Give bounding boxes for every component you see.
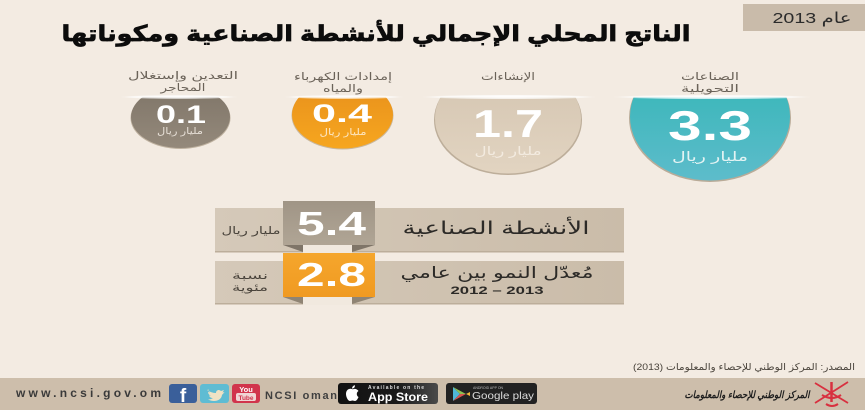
bar: growth rate: 2.8 <box>297 256 366 293</box>
panel: mining and quarrying: مليار ريال <box>157 126 203 137</box>
website address: www.ncsi.gov.om <box>15 386 161 400</box>
bar: industrial activities total: 5.4 <box>297 205 367 242</box>
social account name: NCSI oman <box>265 390 337 402</box>
badge: google play: ANDROID APP ON <box>473 386 504 390</box>
bar: industrial activities total <box>215 201 624 253</box>
icon: youtube: You <box>239 385 253 394</box>
panel: mining and quarrying: المحاجر <box>159 82 206 94</box>
icon: youtube: Tube <box>238 395 254 402</box>
panel: electricity and water supply: والمياه <box>323 83 363 95</box>
icon: youtube <box>232 384 260 403</box>
icon: twitter <box>200 384 229 403</box>
panel: manufacturing industries: الصناعات <box>681 71 739 83</box>
panel: construction <box>429 72 589 175</box>
panel: construction: 1.7 <box>473 103 543 146</box>
footer band <box>0 378 865 410</box>
badge: app store: Available on the <box>368 385 424 391</box>
badge: google play <box>446 383 537 404</box>
badge: app store <box>338 383 438 404</box>
icon: national emblem <box>815 382 848 406</box>
bar: growth rate: مُعدّل النمو بين عامي <box>400 265 594 283</box>
bar: growth rate <box>215 253 624 305</box>
panel: electricity and water supply: مليار ريال <box>320 127 366 138</box>
panel: manufacturing industries: مليار ريال <box>672 149 748 165</box>
title: الناتج المحلي الإجمالي للأنشطة الصناعية ومكوناتها <box>62 19 690 47</box>
bar: industrial activities total: الأنشطة الصناعية <box>402 217 590 238</box>
icon: facebook: f <box>180 386 187 407</box>
panel: mining and quarrying: 0.1 <box>156 101 206 129</box>
bar: growth rate: مئوية <box>232 282 268 294</box>
year tag: عام 2013 <box>772 10 852 27</box>
bar: growth rate: نسبة <box>232 270 268 282</box>
panel: construction: مليار ريال <box>474 144 542 159</box>
icon: facebook <box>169 384 197 407</box>
panel: mining and quarrying: التعدين وإستغلال <box>128 70 238 82</box>
source note: المصدر: المركز الوطني للإحصاء والمعلومات (2013) <box>633 362 855 373</box>
panel: manufacturing industries <box>621 72 803 182</box>
panel: electricity and water supply: إمدادات الكهرباء <box>294 71 392 83</box>
panel: construction: الإنشاءات <box>481 71 535 83</box>
panel: manufacturing industries: التحويلية <box>681 83 739 95</box>
panel: mining and quarrying <box>120 70 238 149</box>
bar: growth rate: 2012 – 2013 <box>450 285 544 297</box>
panel: electricity and water supply: 0.4 <box>312 100 372 128</box>
panel: manufacturing industries: 3.3 <box>668 102 752 149</box>
panel: electricity and water supply <box>290 72 398 150</box>
year tag <box>743 4 865 31</box>
badge: app store: App Store <box>368 390 428 404</box>
organisation name: المركز الوطني للإحصاء والمعلومات <box>684 390 811 401</box>
badge: google play: Google play <box>472 390 535 402</box>
bar: industrial activities total: مليار ريال <box>222 225 280 237</box>
